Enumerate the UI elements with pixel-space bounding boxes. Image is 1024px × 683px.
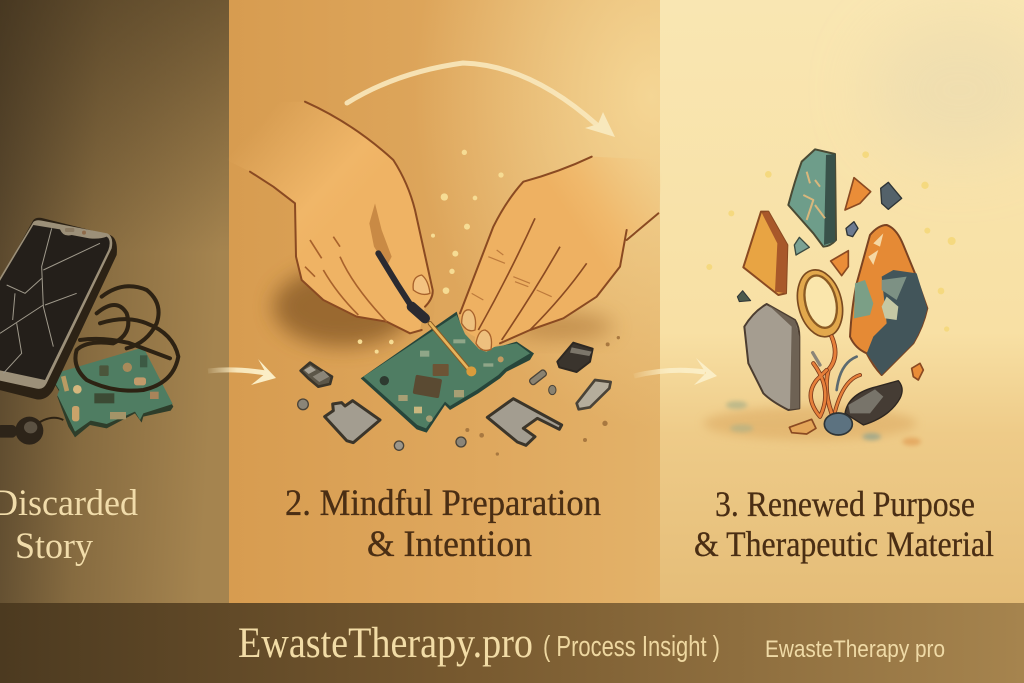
heading: step 3: 3. Renewed Purpose bbox=[715, 484, 975, 524]
small component: dark chip bbox=[557, 343, 593, 372]
panel: mindful preparation background bbox=[229, 0, 660, 603]
panel: renewed purpose background bbox=[660, 0, 1024, 603]
large orange and slate stone bbox=[850, 225, 927, 375]
heading: step 3: & Therapeutic Material bbox=[694, 524, 994, 564]
hand shadow bbox=[273, 267, 613, 347]
right hand bbox=[460, 157, 663, 352]
phone bbox=[0, 218, 117, 399]
screwdriver tool bbox=[378, 253, 476, 376]
copper wires bbox=[811, 337, 860, 417]
circuit board bbox=[50, 347, 173, 437]
arrow: step two to step three bbox=[634, 358, 717, 385]
small component: left cluster bbox=[301, 363, 332, 387]
small component: grey connector bbox=[487, 399, 562, 445]
footer bar bbox=[0, 603, 1024, 683]
orange fragments bbox=[789, 178, 923, 434]
heading: step 2 bbox=[285, 483, 601, 565]
cable tangle bbox=[75, 286, 178, 391]
gold ring bbox=[791, 265, 849, 342]
dark rock bbox=[845, 381, 902, 425]
earbud bbox=[0, 417, 63, 445]
yellow sparkles bbox=[706, 151, 956, 332]
small component: grey shield bbox=[325, 401, 380, 443]
amber shard bbox=[743, 212, 787, 295]
illustration: hands preparing a circuit board bbox=[227, 102, 663, 456]
illustration: renewed therapeutic materials bbox=[703, 149, 956, 446]
circuit board bbox=[361, 312, 534, 433]
green shard bbox=[788, 149, 836, 247]
panel: discarded story background bbox=[0, 0, 229, 603]
heading: step 1: Story bbox=[15, 526, 93, 567]
arrow: curved arc over hands bbox=[347, 63, 597, 125]
arrow: step one to step two bbox=[208, 359, 276, 385]
heading: step 2: & Intention bbox=[367, 524, 532, 565]
blue pebble bbox=[824, 413, 852, 435]
illustration: broken phone, cable and circuit board bbox=[0, 218, 178, 445]
small component: silver plug bbox=[577, 380, 611, 409]
brand title: EwasteTherapy.pro bbox=[238, 620, 533, 667]
heading: step 1 bbox=[0, 483, 138, 567]
brand watermark: EwasteTherapy pro bbox=[765, 636, 945, 663]
slate fragments bbox=[737, 182, 902, 302]
arrow: curved arc head bbox=[585, 112, 615, 137]
subtitle: process insight: ( Process Insight ) bbox=[543, 631, 720, 663]
heading: step 2: 2. Mindful Preparation bbox=[285, 483, 601, 524]
sparkles bbox=[358, 150, 504, 354]
grey stone bbox=[744, 304, 799, 410]
ground shadow bbox=[703, 401, 921, 446]
heading: step 3 bbox=[694, 484, 994, 564]
small debris pieces bbox=[298, 336, 620, 456]
left hand bbox=[227, 102, 433, 333]
